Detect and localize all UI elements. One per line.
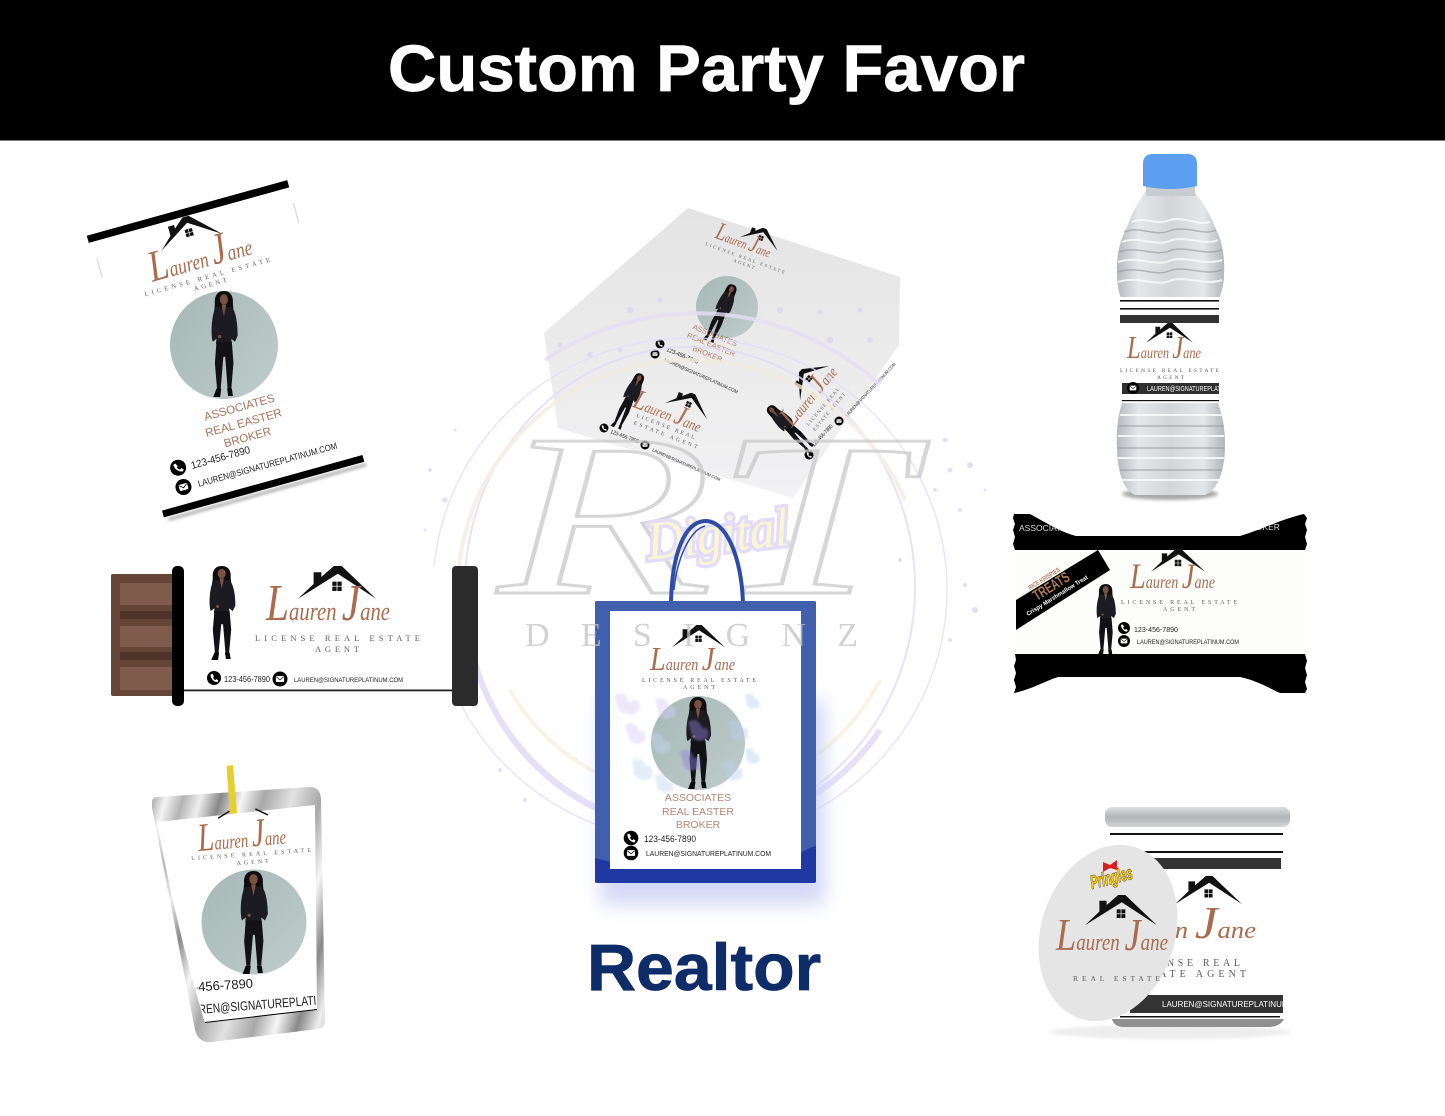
job title	[200, 392, 287, 454]
contact details: 123-456-7890	[644, 834, 696, 844]
job title: ASSOCIATES	[203, 393, 276, 424]
round lid sticker	[1016, 827, 1200, 1039]
party favor: tilted card with bars	[86, 180, 367, 522]
logo	[642, 625, 756, 691]
party favor: chocolate bar wrapper	[111, 566, 478, 706]
party favor: shopping bag	[595, 521, 825, 905]
logo	[255, 566, 420, 654]
pringles logo: Pringles	[1088, 863, 1135, 894]
top panel contact details: LAUREN@SIGNATUREPLATINUM.COM	[663, 357, 739, 395]
lower left panel artwork: LICENSE REAL	[635, 413, 696, 441]
logo: LICENSE REAL ESTATE	[642, 678, 756, 684]
party favor: juice pouch: LICENSE REAL ESTATE	[191, 848, 312, 862]
logo: Lauren Jane	[1129, 556, 1215, 596]
title: Custom Party Favor	[388, 31, 1025, 105]
bottle label: AGENT	[1157, 375, 1185, 381]
job title: BROKER	[223, 426, 273, 450]
contact details	[196, 978, 317, 1023]
job title	[662, 792, 734, 831]
chocolate	[111, 574, 177, 696]
subtitle: Realtor	[587, 930, 821, 1004]
top panel logo: AGENT	[733, 258, 755, 270]
logo: LICENSE REAL ESTATE	[1121, 600, 1237, 606]
lower left panel artwork: LAUREN@SIGNATUREPLATINUM.COM	[652, 447, 722, 482]
watermark monogram: RT	[495, 387, 929, 644]
lower left panel artwork	[600, 371, 722, 482]
contact details: LAUREN@SIGNATUREPLATINUM.COM	[646, 849, 771, 858]
contact details: 3-456-7890	[186, 976, 253, 995]
logo: Lauren Jane	[649, 641, 735, 678]
lower right panel artwork: 123-456-7890	[811, 424, 835, 448]
portrait	[202, 870, 306, 974]
top panel contact details: 123-456-7890	[665, 347, 700, 366]
bottle label: LICENSE REAL ESTATE	[1120, 368, 1220, 374]
lower right panel artwork: Lauren Jane	[773, 357, 844, 433]
top panel job title: ASSOCIATES	[691, 322, 739, 348]
top panel portrait	[696, 276, 758, 345]
contact details: 123-456-7890	[1134, 625, 1178, 634]
logo: LICENSE REAL ESTATE	[255, 633, 420, 643]
contact details: 123-456-7890	[190, 444, 252, 472]
contact details: LAUREN@SIGNATUREPLATINUM.COM	[1137, 640, 1239, 646]
woman	[1097, 584, 1116, 655]
top panel job title: BROKER	[691, 344, 724, 364]
logo: AGENT	[1163, 607, 1195, 613]
logo: Lauren Jane	[195, 808, 287, 860]
can body: LICENSE REAL	[1130, 958, 1240, 969]
bottle shadow	[1122, 488, 1218, 500]
party favor: juice pouch	[152, 765, 325, 1042]
contact details	[1118, 622, 1239, 647]
woman	[210, 566, 235, 660]
lower right panel artwork: LAUREN@SIGNATUREPLATINUM.COM	[844, 361, 897, 418]
party favor: water bottle	[1117, 154, 1235, 500]
watermark overlay: butterflies and wordmark	[525, 617, 858, 792]
logo: AGENT	[683, 685, 715, 691]
top panel job title	[682, 321, 741, 368]
portrait	[157, 277, 290, 411]
watermark butterflies	[615, 693, 760, 792]
can body: LAUREN@SIGNATUREPLATINUM.COM	[1162, 1000, 1310, 1009]
contact details: LAUREN@SIGNATUREPLATINUM.COM	[197, 441, 338, 489]
lower left panel artwork: ESTATE AGENT	[633, 420, 699, 451]
party favor: rice krispies treat wrapper: BROKER	[1244, 522, 1280, 532]
portrait	[651, 696, 745, 790]
job title: REAL EASTER	[662, 806, 734, 818]
lower left panel artwork: Lauren Jane	[628, 384, 708, 439]
top panel logo: Lauren Jane	[711, 218, 776, 263]
party favor: rice krispies treat wrapper	[1013, 514, 1307, 693]
lower left panel artwork: 123-456-7890	[609, 429, 640, 445]
can lid	[1105, 807, 1290, 827]
logo: LICENSE REAL ESTATE	[144, 257, 271, 298]
contact details: LAUREN@SIGNATUREPLATINUM.COM	[294, 677, 403, 684]
bottle label: Lauren Jane	[1126, 329, 1201, 365]
top panel logo: LICENSE REAL ESTATE	[705, 241, 786, 275]
bottle label	[1120, 297, 1219, 403]
bottle label: LAUREN@SIGNATUREPLATINUM	[1147, 386, 1235, 393]
lid logo	[1085, 895, 1157, 925]
round lid sticker: Lauren Jane	[1055, 909, 1168, 960]
contact details	[624, 831, 771, 860]
job title: ASSOCIATES	[665, 792, 731, 804]
lower right panel artwork	[763, 353, 897, 460]
party favor: rice krispies treat wrapper: ASSOCIATES	[1019, 523, 1073, 533]
bottle body	[1117, 190, 1225, 495]
watermark splatter	[424, 298, 986, 822]
job title: REAL EASTER	[204, 407, 283, 440]
bottle cap	[1143, 154, 1197, 196]
watermark script word: Digital	[643, 497, 791, 571]
logo: Lauren Jane	[141, 216, 257, 292]
lower right panel artwork: ESTATE AGENT	[813, 393, 847, 433]
can body: Lauren Jane	[1111, 897, 1256, 948]
logo: AGENT	[193, 277, 228, 293]
party favor: gift box	[544, 208, 900, 498]
wrapper black ends	[1013, 514, 1307, 550]
watermark wordmark: DESIGNZ	[525, 617, 858, 654]
can shadow	[1050, 1025, 1290, 1039]
watermark rings and monogram	[424, 298, 986, 842]
contact details	[168, 418, 339, 497]
brand banner: RICE KRISPIES	[1027, 566, 1062, 592]
round lid sticker: REAL ESTATE	[1073, 974, 1160, 983]
title banner	[0, 0, 1445, 140]
top panel contact details	[650, 340, 739, 395]
straw	[226, 765, 237, 814]
brand banner: Crispy Marshmallow Treat	[1026, 575, 1089, 618]
pringles logo	[1088, 860, 1135, 894]
brand banner: TREATS	[1030, 569, 1073, 604]
logo	[127, 198, 273, 306]
lower right panel artwork: LICENSE REAL	[806, 387, 841, 427]
job title: BROKER	[676, 819, 721, 831]
contact details: 123-456-7890	[224, 674, 270, 684]
contact details: REN@SIGNATUREPLATI	[198, 993, 317, 1017]
logo: Lauren Jane	[265, 575, 390, 632]
can body: ESTATE AGENT	[1130, 969, 1246, 980]
watermark rings	[433, 313, 947, 842]
can body	[1110, 833, 1284, 1027]
logo: AGENT	[315, 644, 360, 654]
bag handles	[671, 521, 743, 602]
contact details	[207, 671, 403, 686]
top panel job title: REAL EASTER	[686, 331, 737, 359]
party favor: juice pouch: AGENT	[237, 859, 269, 867]
logo	[1121, 549, 1237, 613]
top panel logo	[703, 211, 797, 280]
party favor: pringles can	[1038, 807, 1290, 1039]
brand banner	[1016, 550, 1110, 630]
